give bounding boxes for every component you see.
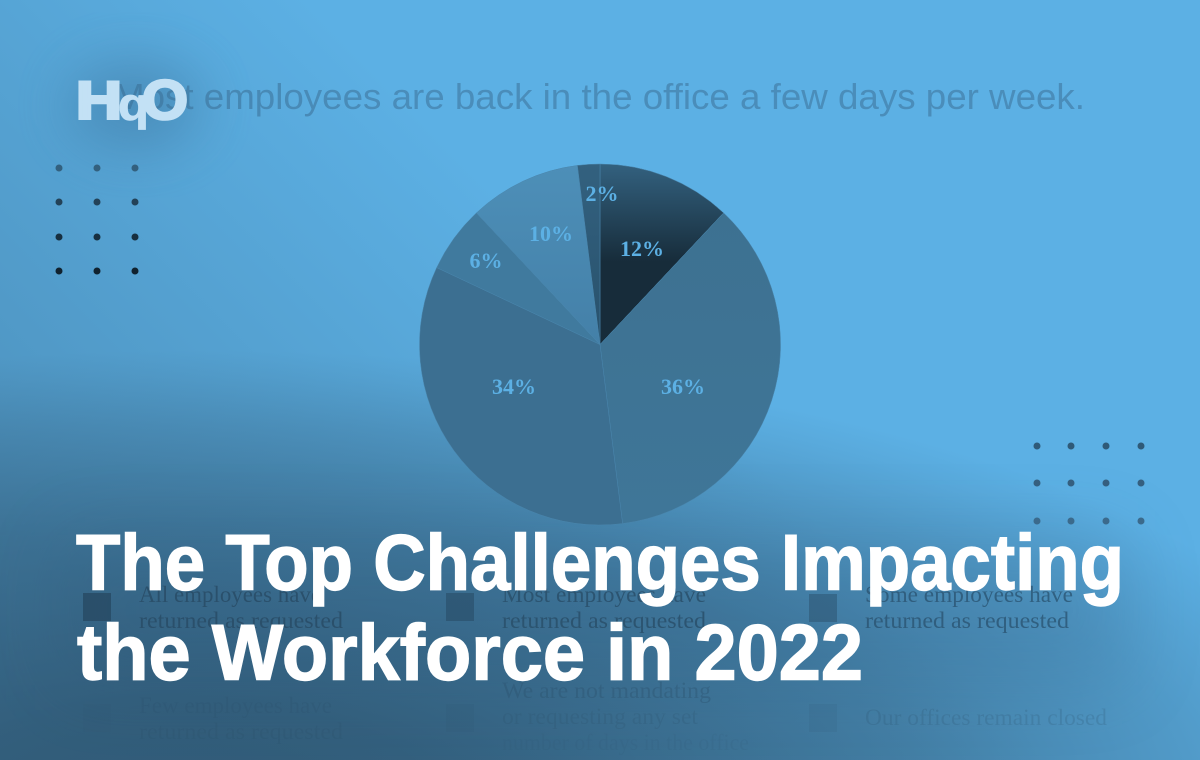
title: the Workforce in 2022 — [77, 608, 863, 696]
legend item: most employees: returned as requested — [502, 608, 707, 633]
slice: 2% — [577, 164, 600, 344]
pie value labels: 6% — [470, 248, 502, 273]
slice: 12% — [600, 164, 724, 344]
legend item: most employees: Most employees have — [502, 582, 706, 607]
pie value labels: 12% — [620, 236, 664, 261]
logo: HqO: H — [76, 72, 122, 130]
title shadow — [60, 535, 1130, 685]
legend item: few employees — [83, 693, 344, 744]
legend item: all employees: returned as requested — [139, 608, 344, 633]
logo: HqO: q — [118, 78, 149, 130]
title — [76, 518, 1124, 696]
slice: 6% — [437, 213, 600, 344]
subheading: Most employees are back in the office a few days per week. — [114, 76, 1085, 117]
slice: 34% — [419, 268, 623, 525]
legend item: not mandating: number of days in the office — [502, 730, 749, 755]
pie value labels: 2% — [586, 181, 618, 206]
pie value labels: 34% — [492, 374, 536, 399]
legend item: some employees: Some employees have — [865, 582, 1073, 607]
dot grid: right — [1034, 442, 1144, 524]
logo: HqO: O — [142, 68, 188, 131]
logo shadow — [70, 63, 200, 147]
dot grid: top left — [56, 164, 138, 274]
legend item: not mandating — [446, 678, 749, 755]
pie chart — [419, 164, 781, 525]
legend item: few employees: Few employees have — [139, 693, 332, 718]
logo: HqO — [76, 68, 188, 131]
legend — [83, 582, 1108, 755]
legend item: offices closed: Our offices remain closed — [865, 705, 1108, 730]
legend item: some employees — [809, 582, 1073, 633]
legend item: not mandating: or requesting any set — [502, 704, 699, 729]
pie value labels — [470, 181, 705, 399]
legend item: all employees: All employees have — [139, 582, 321, 607]
legend item: not mandating: We are not mandating — [502, 678, 712, 703]
legend item: most employees — [446, 582, 707, 633]
legend item: some employees: returned as requested — [865, 608, 1070, 633]
slice: 10% — [476, 165, 600, 344]
pie value labels: 10% — [529, 221, 573, 246]
slice: 36% — [600, 213, 781, 524]
legend item: all employees — [83, 582, 344, 633]
pie value labels: 36% — [661, 374, 705, 399]
title: The Top Challenges Impacting — [76, 518, 1124, 606]
legend item: few employees: returned as requested — [139, 719, 344, 744]
